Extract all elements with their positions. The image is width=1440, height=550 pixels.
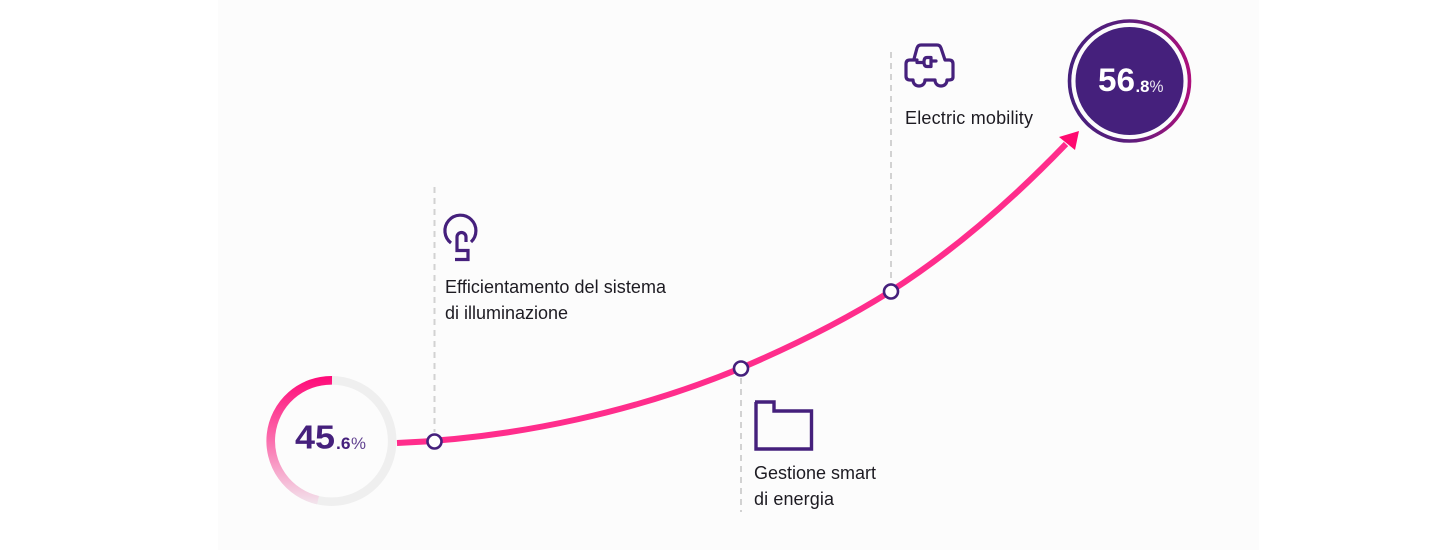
icon: electric car [906,45,953,86]
icon: folder [755,402,812,449]
dashed guide lines [434,52,891,512]
start gauge: 45.6%: .6 [336,434,350,453]
curve node 3 [884,284,898,298]
arrow head [1059,131,1079,150]
curve node 2 [734,362,748,376]
end gauge: 56.8% [1070,21,1190,141]
text: lighting efficiency: Efficientamento del sistema [445,277,667,297]
icon: light bulb [445,215,476,260]
growth curve [397,144,1066,443]
background panel [218,0,1259,550]
text: electric mobility: Electric mobility [905,108,1033,128]
end gauge: 56.8%: 56 [1098,62,1135,98]
curve node 1 [428,434,442,448]
start gauge: 45.6%: 45 [295,418,335,456]
text: smart energy management: di energia [754,489,835,509]
start gauge: 45.6% [271,380,392,502]
text: lighting efficiency: di illuminazione [445,303,568,323]
end gauge: 56.8%: .8 [1136,77,1150,96]
start gauge: 45.6%: % [351,434,366,453]
text: smart energy management: Gestione smart [754,463,876,483]
end gauge: 56.8%: % [1150,77,1164,96]
